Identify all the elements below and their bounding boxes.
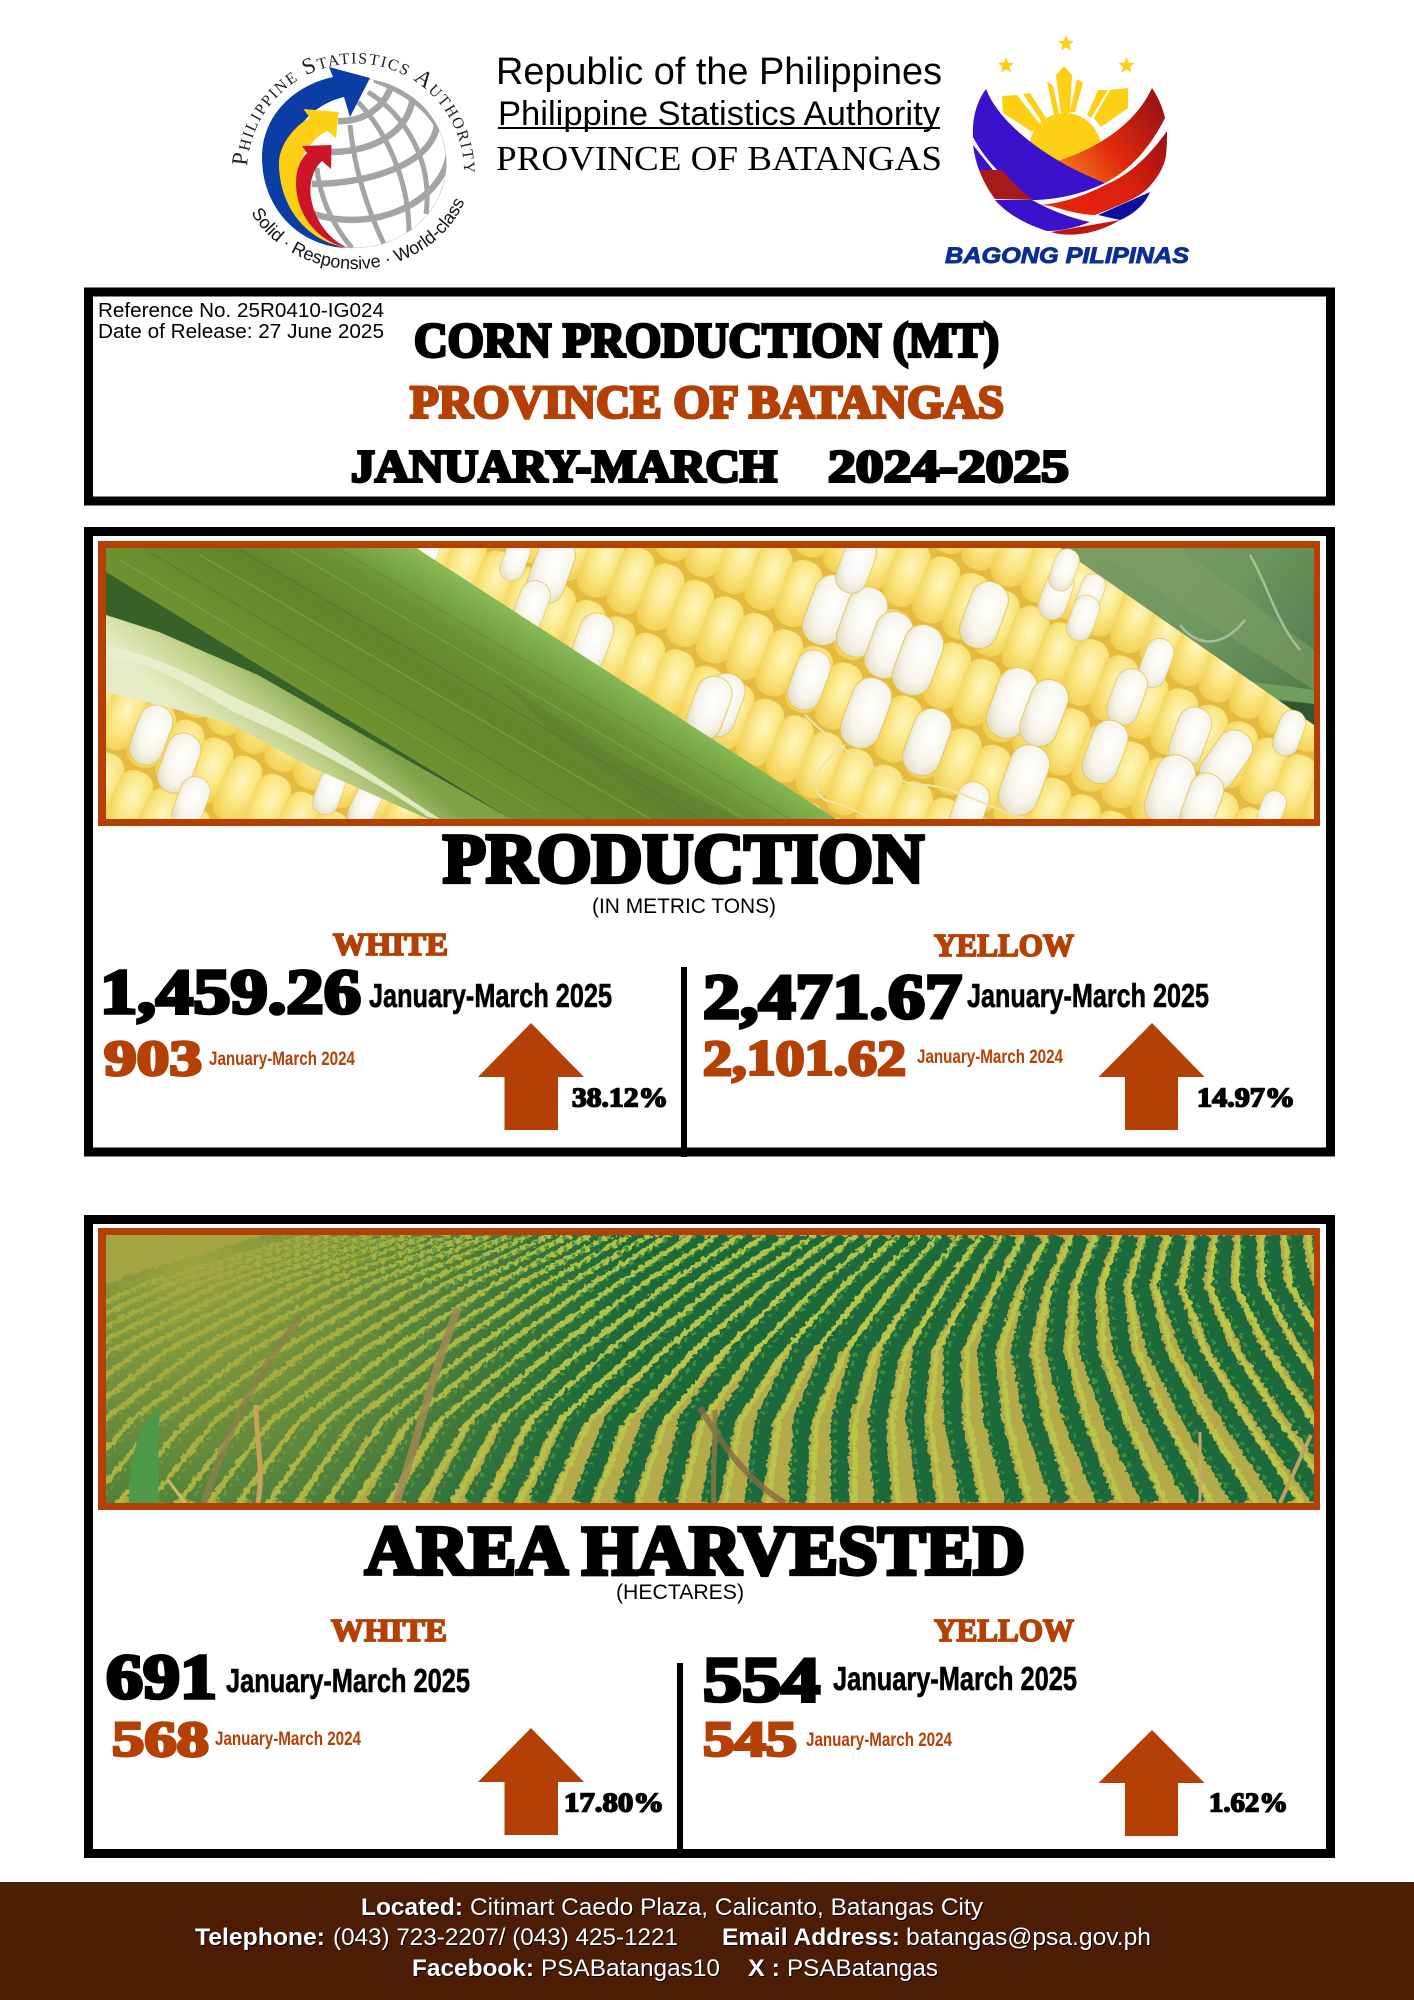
heading: PRODUCTION — [443, 821, 924, 898]
white corn figures: January-March 2025 — [369, 977, 612, 1014]
divider — [681, 967, 687, 1157]
seal name text: Philippine Statistics Authority — [232, 53, 475, 172]
white corn figures: January-March 2024 — [209, 1048, 355, 1070]
white corn figures: 691 — [106, 1641, 217, 1712]
white corn figures: January-March 2025 — [226, 1662, 470, 1699]
social media line: PSABatangas — [787, 1955, 938, 1982]
agency heading — [496, 51, 942, 178]
heading: AREA HARVESTED — [365, 1513, 1025, 1590]
tricolour bands — [1054, 88, 1165, 183]
title line 3 — [351, 440, 1069, 492]
white kernels — [412, 531, 1309, 843]
yellow arrow — [279, 109, 344, 247]
yellow corn label: YELLOW — [934, 927, 1074, 963]
yellow corn figures — [703, 961, 1209, 1086]
title line 2: PROVINCE OF BATANGAS — [410, 376, 1004, 428]
title line 3: 2024-2025 — [828, 440, 1069, 492]
arrow up: white corn — [478, 1728, 584, 1835]
lower left corn kernels — [106, 692, 428, 819]
yellow corn figures: January-March 2025 — [833, 1660, 1077, 1697]
main corn kernels — [416, 548, 1314, 819]
light husk — [106, 615, 511, 819]
title line 3: JANUARY-MARCH — [351, 440, 777, 492]
white corn label: WHITE — [331, 1612, 447, 1648]
reference number and release date: Date of Release: 27 June 2025 — [98, 320, 384, 343]
lower left white kernels — [129, 704, 382, 819]
corn silk — [805, 715, 1030, 820]
telephone and email line: batangas@psa.gov.ph — [906, 1924, 1151, 1951]
yellow corn figures: 554 — [703, 1644, 820, 1715]
arrow up: white corn — [478, 1023, 584, 1130]
red arrow — [296, 145, 348, 248]
panel: area harvested — [84, 1215, 1335, 1858]
telephone and email line: Email Address: — [722, 1924, 900, 1951]
white corn figures: January-March 2024 — [215, 1728, 361, 1750]
foreground grass and stalks — [129, 1308, 1311, 1503]
percent change: yellow corn: 14.97% — [1197, 1082, 1295, 1112]
social media line: PSABatangas10 — [541, 1955, 720, 1982]
yellow corn figures: January-March 2024 — [917, 1046, 1063, 1068]
unit note: (HECTARES) — [616, 1581, 744, 1604]
telephone and email line: (043) 723-2207/ (043) 425-1221 — [333, 1924, 678, 1951]
arrow up: yellow corn — [1098, 1023, 1204, 1130]
white corn figures — [106, 1641, 470, 1766]
location line: Located: — [361, 1894, 463, 1921]
province line: PROVINCE OF BATANGAS — [496, 139, 942, 178]
husk fibres — [120, 550, 790, 819]
reference number and release date: Reference No. 25R0410-IG024 — [98, 299, 384, 322]
footer — [0, 1882, 1414, 2000]
globe grid — [262, 78, 449, 248]
white corn figures: 903 — [104, 1030, 202, 1086]
logo: Philippine Statistics Authority seal — [232, 53, 475, 270]
reference number and release date — [98, 299, 384, 343]
divider — [677, 1663, 683, 1853]
authority line: Philippine Statistics Authority — [498, 95, 940, 133]
blue arrow — [262, 67, 370, 248]
telephone and email line: Telephone: — [195, 1924, 325, 1951]
logo: Bagong Pilipinas — [945, 35, 1189, 268]
republic line: Republic of the Philippines — [496, 51, 942, 93]
yellow corn figures: January-March 2025 — [967, 977, 1209, 1014]
yellow corn figures: 2,471.67 — [703, 961, 962, 1032]
social media line — [412, 1955, 938, 1982]
white corn figures: 1,459.26 — [100, 956, 361, 1027]
seal motto text: Solid · Responsive · World-class — [252, 198, 464, 270]
yellow corn figures: 2,101.62 — [703, 1030, 906, 1086]
title line 1: CORN PRODUCTION (MT) — [414, 312, 999, 368]
arrow up: yellow corn — [1098, 1730, 1204, 1836]
social media line: X : — [748, 1955, 780, 1982]
yellow corn figures — [703, 1644, 1077, 1766]
photo: corn field rows — [98, 1228, 1320, 1510]
panel: title box — [88, 292, 1330, 501]
location line: Citimart Caedo Plaza, Calicanto, Batangas City — [470, 1894, 984, 1921]
white corn label: WHITE — [333, 926, 448, 962]
sun and rays — [1002, 66, 1128, 185]
logo wordmark: BAGONG PILIPINAS — [945, 243, 1189, 268]
unit note: (IN METRIC TONS) — [592, 895, 776, 918]
yellow corn figures: January-March 2024 — [806, 1729, 952, 1751]
white corn figures: 568 — [112, 1710, 209, 1766]
dark shadow between husks — [106, 560, 511, 819]
percent change: white corn: 38.12% — [572, 1082, 668, 1112]
telephone and email line — [195, 1924, 1151, 1951]
yellow corn label: YELLOW — [934, 1612, 1074, 1648]
percent change: white corn: 17.80% — [564, 1788, 664, 1818]
yellow corn figures: 545 — [703, 1710, 797, 1766]
panel: production — [88, 531, 1330, 1157]
social media line: Facebook: — [412, 1955, 534, 1982]
photo: corn cobs — [98, 531, 1320, 843]
stars — [998, 35, 1134, 72]
main husk — [106, 548, 836, 819]
percent change: yellow corn: 1.62% — [1209, 1788, 1288, 1818]
white corn figures — [100, 956, 612, 1086]
